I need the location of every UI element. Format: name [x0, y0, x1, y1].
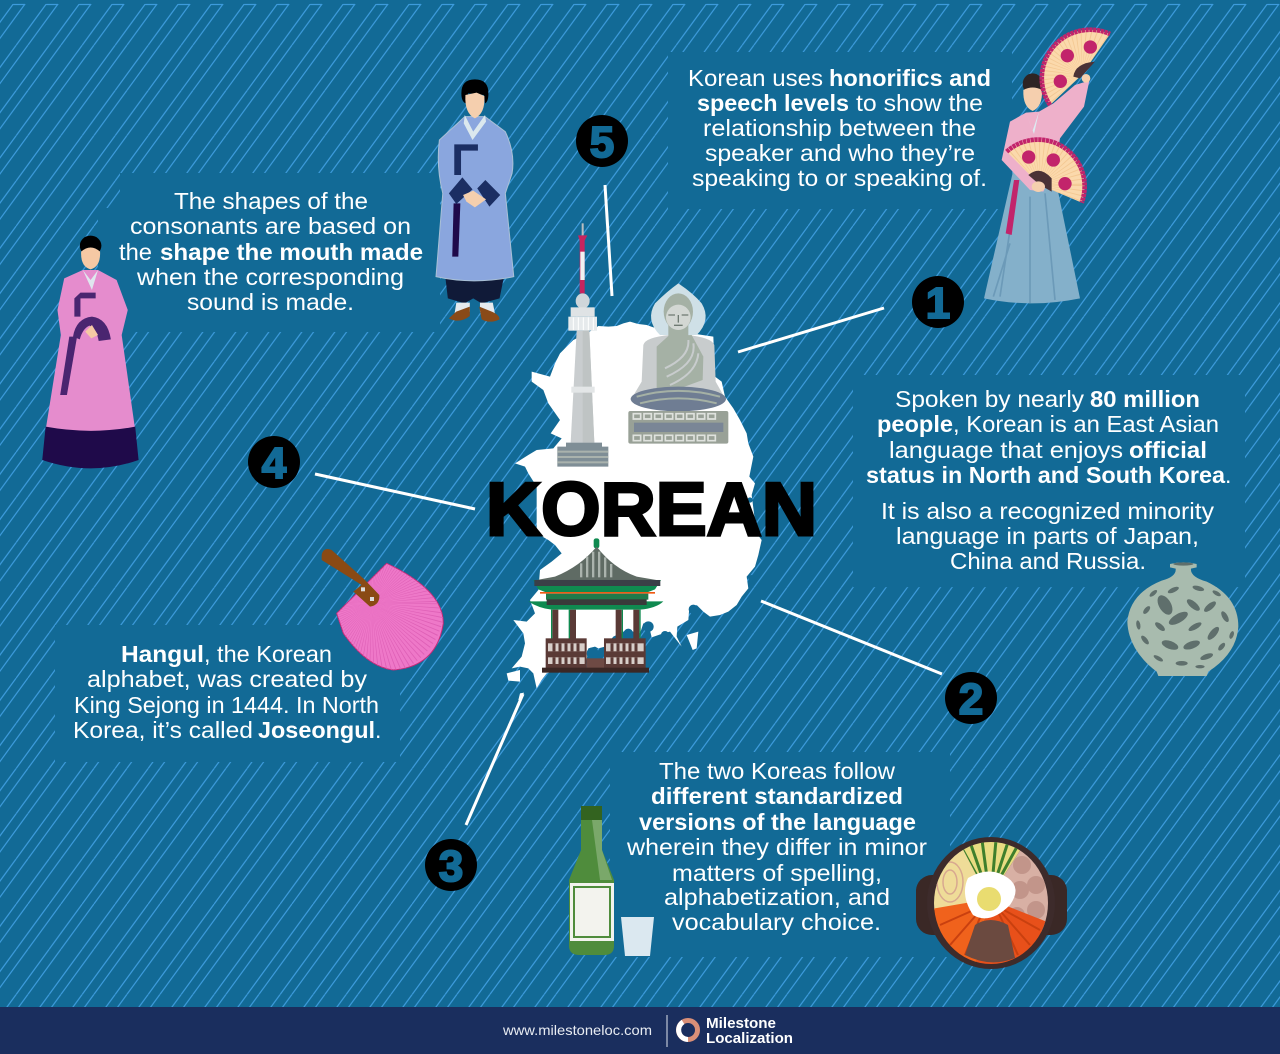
panel: honorifics: relationship between the: [703, 115, 976, 141]
icon: bibimbap bowl: [916, 835, 1067, 970]
number badge 5: [576, 115, 628, 167]
icon: Namsan tower: [557, 223, 608, 467]
connector line 1: [738, 308, 884, 352]
panel: consonants: consonants are based on: [130, 213, 411, 239]
panel: speakers: official: [1129, 437, 1207, 463]
connector line 3: [466, 694, 523, 825]
panel: two Koreas: wherein they differ in minor: [626, 834, 927, 860]
icon: dancer with fans: [984, 30, 1110, 303]
icon: soju bottle: [569, 806, 614, 955]
number badge 3: [425, 839, 477, 891]
connector line 5: [605, 185, 612, 296]
icon: pink hand fan: [322, 549, 443, 670]
panel: honorifics: speech levels: [697, 90, 849, 116]
logo mark: [678, 1020, 698, 1040]
panel: two Koreas: different standardized: [651, 783, 903, 809]
panel: two Koreas: versions of the language: [639, 809, 916, 835]
panel: two Koreas: alphabetization, and: [664, 884, 890, 910]
icon: Buddha statue: [628, 283, 728, 444]
number badge 5: 5: [590, 118, 614, 167]
panel: consonants: [98, 173, 440, 332]
number badge 4: 4: [262, 439, 287, 488]
number badge 3: 3: [439, 842, 463, 891]
footer url: www.milestoneloc.com: [502, 1022, 652, 1038]
panel: speakers: people: [877, 411, 953, 437]
icon: woman in pink hanbok: [42, 236, 139, 468]
number badge 2: [945, 672, 997, 724]
icon: celadon vase: [1127, 562, 1238, 676]
panel: hangul: Korea, it’s called: [73, 717, 253, 743]
panel: hangul: Joseongul: [258, 717, 375, 743]
panel: speakers: Spoken by nearly: [895, 386, 1085, 412]
icon: man in blue hanbok: [436, 79, 514, 322]
number badge 2: 2: [959, 675, 983, 724]
number badge 1: 1: [926, 279, 950, 328]
panel: hangul: , the Korean: [204, 641, 332, 667]
connector line 2: [761, 601, 942, 674]
panel: speakers: language that enjoys: [889, 437, 1123, 463]
panel: speakers: It is also a recognized minority: [881, 498, 1215, 524]
panel: honorifics: honorifics and: [829, 65, 991, 91]
panel: two Koreas: vocabulary choice.: [672, 909, 881, 935]
panel: hangul: [55, 625, 400, 762]
panel: consonants: sound is made.: [187, 289, 354, 315]
icon: soju glass: [621, 917, 654, 956]
panel: speakers: 80 million: [1090, 386, 1200, 412]
panel: consonants: shape the mouth made: [160, 239, 423, 265]
panel: speakers: .: [1225, 462, 1231, 488]
logo wordmark: Localization: [706, 1031, 793, 1047]
number badge 1: [912, 276, 964, 328]
panel: honorifics: [668, 52, 1012, 209]
panel: consonants: The shapes of the: [174, 188, 368, 214]
panel: speakers: [853, 375, 1245, 587]
panel: speakers: language in parts of Japan,: [896, 523, 1199, 549]
panel: consonants: the: [119, 239, 152, 265]
panel: honorifics: to show the: [856, 90, 983, 116]
number badge 4: [248, 436, 300, 488]
panel: consonants: when the corresponding: [136, 264, 404, 290]
panel: speakers: China and Russia.: [950, 548, 1146, 574]
panel: hangul: King Sejong in 1444. In North: [74, 692, 379, 718]
panel: two Koreas: matters of spelling,: [672, 860, 882, 886]
icon: pavilion: [528, 538, 663, 673]
panel: hangul: Hangul: [121, 641, 204, 667]
panel: two Koreas: [610, 752, 950, 957]
panel: honorifics: speaking to or speaking of.: [692, 165, 987, 191]
panel: honorifics: speaker and who they’re: [705, 140, 975, 166]
logo wordmark: [706, 1016, 793, 1047]
panel: hangul: .: [375, 717, 381, 743]
footer bar: [0, 1007, 1280, 1054]
panel: speakers: , Korean is an East Asian: [953, 411, 1219, 437]
panel: honorifics: Korean uses: [688, 65, 823, 91]
connector line 4: [315, 474, 475, 509]
logo wordmark: Milestone: [706, 1016, 776, 1032]
panel: two Koreas: The two Koreas follow: [659, 758, 895, 784]
map of Korea: [507, 322, 762, 700]
panel: hangul: alphabet, was created by: [87, 666, 368, 692]
title: KOREAN: [486, 467, 817, 551]
panel: speakers: status in North and South Korea: [866, 462, 1225, 488]
